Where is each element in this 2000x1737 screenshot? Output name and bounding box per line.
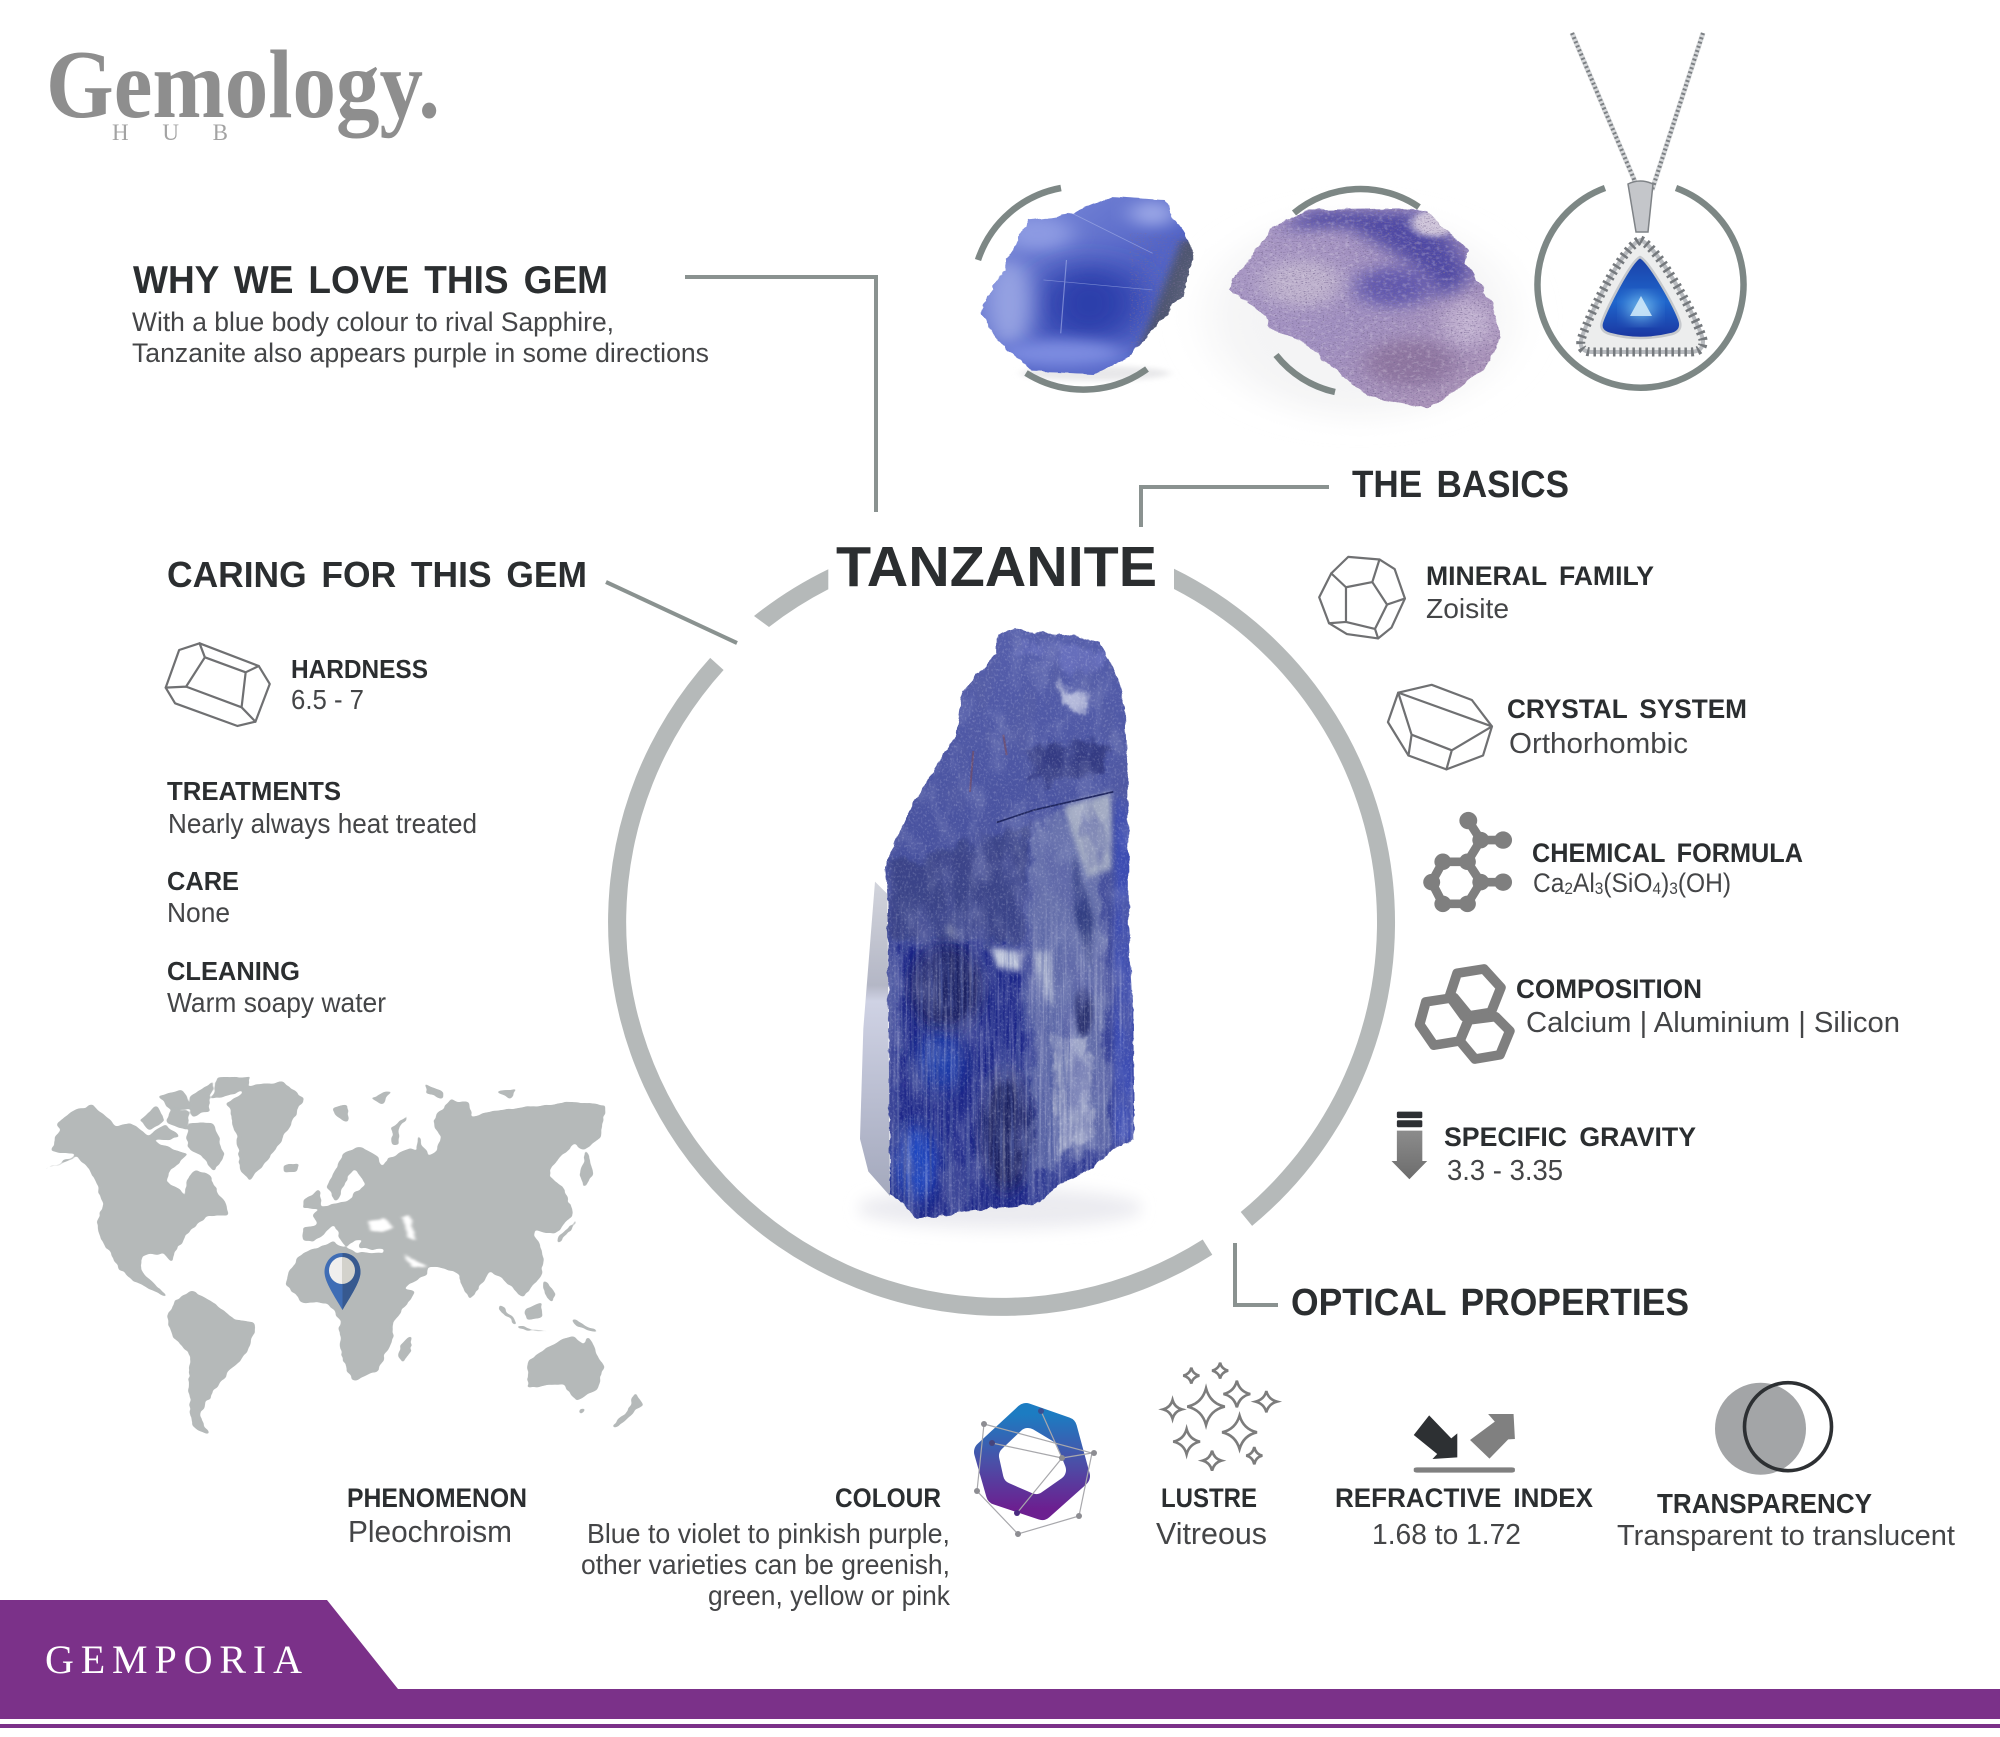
text: specific gravity: SPECIFIC GRAVITY <box>1444 1122 1696 1152</box>
text: chemical formula: 2 <box>1564 879 1573 898</box>
text: treatments: Nearly always heat treated <box>168 808 477 839</box>
text: cleaning <box>167 956 386 1018</box>
icon: specific gravity arrow <box>1392 1112 1427 1179</box>
text: chemical formula: Ca <box>1533 868 1568 898</box>
text: colour: COLOUR <box>835 1483 941 1513</box>
connector: optical properties <box>1235 1243 1278 1305</box>
text: crystal system: Orthorhombic <box>1509 728 1688 760</box>
text: crystal system: CRYSTAL SYSTEM <box>1507 694 1747 724</box>
icon: lustre stars <box>1163 1363 1277 1471</box>
text: treatments: TREATMENTS <box>167 776 341 806</box>
icon: colour gem <box>974 1408 1097 1537</box>
text: phenomenon <box>347 1483 527 1549</box>
panel: why we love this gem: WHY WE LOVE THIS GEM <box>133 259 608 302</box>
connector: why we love <box>685 277 876 512</box>
logo: Gemology Hub: H U B <box>112 120 228 145</box>
text: chemical formula: 3 <box>1595 879 1603 898</box>
text: lustre: LUSTRE <box>1161 1483 1257 1513</box>
text: transparency: TRANSPARENCY <box>1657 1488 1872 1519</box>
text: specific gravity: 3.3 - 3.35 <box>1447 1155 1563 1187</box>
panel: the basics list <box>1319 557 1900 1187</box>
image: main tanzanite crystal <box>857 620 1143 1233</box>
text: treatments <box>167 776 477 839</box>
icon: mineral family <box>1319 557 1405 638</box>
icon: molecule <box>1423 812 1512 912</box>
image: rough purple tanzanite <box>1210 189 1520 420</box>
text: refractive index: 1.68 to 1.72 <box>1372 1519 1521 1551</box>
text: chemical formula: ) <box>1661 868 1669 898</box>
icon: transparency discs <box>1715 1383 1832 1475</box>
text: composition: Calcium | Aluminium | Silicon <box>1526 1007 1900 1039</box>
text: colour: other varieties can be greenish, <box>581 1549 950 1580</box>
connector: caring <box>606 582 737 643</box>
footer brand: GEMPORIA <box>45 1637 302 1682</box>
text: mineral family: Zoisite <box>1426 593 1509 624</box>
text: composition <box>1516 974 1900 1039</box>
text: care <box>167 866 239 928</box>
text: specific gravity <box>1444 1122 1696 1187</box>
logo: Gemology Hub: Gemology. <box>46 31 440 139</box>
image: rough blue tanzanite <box>975 184 1194 393</box>
text: hardness: HARDNESS <box>291 654 428 684</box>
panel: why we love this gem: With a blue body colour to rival Sapphire, <box>132 307 614 337</box>
text: colour: green, yellow or pink <box>708 1580 951 1611</box>
title: TANZANITE <box>836 535 1157 599</box>
text: phenomenon: PHENOMENON <box>347 1483 527 1513</box>
text: hardness <box>291 654 428 715</box>
text: chemical formula: CHEMICAL FORMULA <box>1532 838 1803 868</box>
text: refractive index <box>1335 1483 1593 1551</box>
text: colour <box>581 1483 951 1611</box>
text: chemical formula: Al <box>1573 868 1595 898</box>
text: phenomenon: Pleochroism <box>348 1514 512 1549</box>
world map <box>41 1077 642 1433</box>
text: mineral family <box>1426 561 1654 624</box>
icon: refractive index arrows <box>1414 1414 1515 1473</box>
icon: composition hexagons <box>1420 969 1510 1059</box>
footer band <box>0 1600 2000 1728</box>
connector: the basics <box>1141 487 1329 527</box>
text: cleaning: CLEANING <box>167 956 300 986</box>
ring around main crystal <box>608 569 1395 1316</box>
text: mineral family: MINERAL FAMILY <box>1426 561 1654 591</box>
image: tanzanite pendant necklace <box>1538 33 1743 388</box>
text: lustre: Vitreous <box>1156 1516 1267 1551</box>
text: chemical formula: (SiO <box>1603 868 1652 898</box>
text: refractive index: REFRACTIVE INDEX <box>1335 1483 1593 1513</box>
panel: why we love this gem <box>132 259 709 368</box>
text: colour: Blue to violet to pinkish purple, <box>587 1518 950 1549</box>
text: hardness: 6.5 - 7 <box>291 684 364 715</box>
text: composition: COMPOSITION <box>1516 974 1702 1004</box>
panel: caring for this gem <box>166 554 737 1018</box>
panel: caring for this gem: CARING FOR THIS GEM <box>167 554 587 595</box>
heading: the basics: THE BASICS <box>1352 464 1569 506</box>
icon: hardness crystal <box>166 643 270 726</box>
text: transparency: Transparent to translucent <box>1617 1520 1955 1552</box>
text: chemical formula: 4 <box>1652 879 1661 898</box>
text: lustre <box>1156 1483 1267 1551</box>
text: cleaning: Warm soapy water <box>167 987 386 1018</box>
icon: crystal system <box>1388 685 1492 769</box>
icon: location pin <box>324 1253 360 1310</box>
text: care: None <box>167 897 230 928</box>
text: transparency <box>1617 1488 1955 1552</box>
text: chemical formula: (OH) <box>1678 868 1731 898</box>
text: chemical formula: 3 <box>1669 879 1678 898</box>
heading: optical properties: OPTICAL PROPERTIES <box>1291 1282 1689 1324</box>
text: crystal system <box>1507 694 1747 760</box>
panel: why we love this gem: Tanzanite also appears purple in some directions <box>132 338 709 368</box>
text: care: CARE <box>167 866 239 896</box>
text: chemical formula <box>1532 838 1803 898</box>
